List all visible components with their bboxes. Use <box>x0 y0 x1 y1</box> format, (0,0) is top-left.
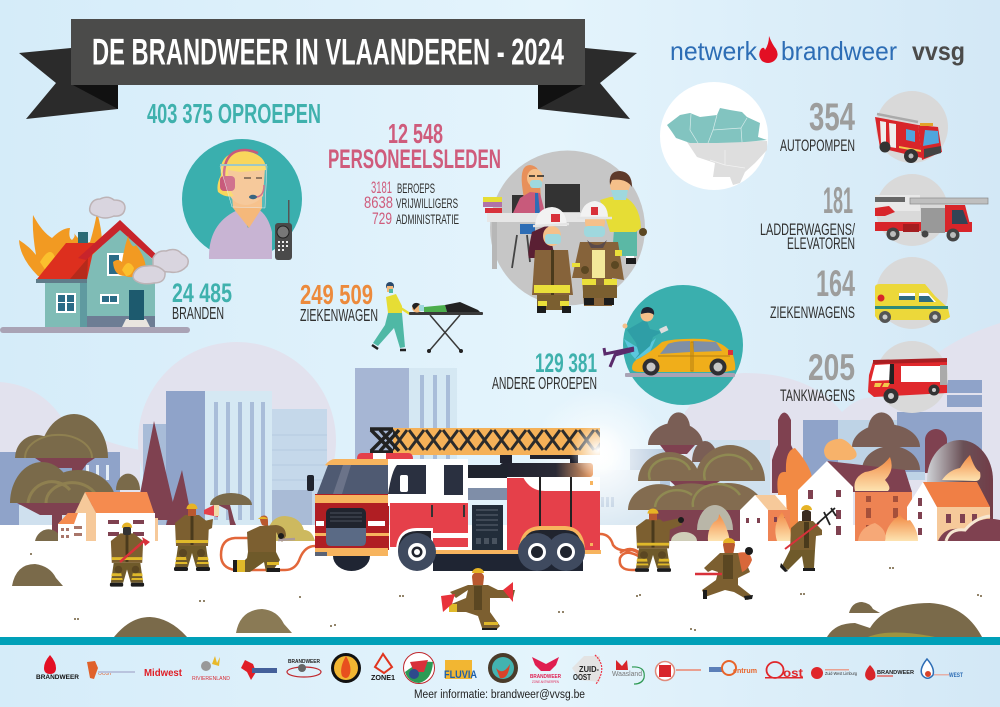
staff breakdown: VRIJWILLIGERS <box>396 196 458 211</box>
heading: staff: PERSONEELSLEDEN <box>328 144 501 174</box>
logo: oost <box>765 662 803 680</box>
logo: round emblem <box>404 652 434 684</box>
yellow car <box>632 339 735 376</box>
logo: waasland: Waasland <box>612 669 642 678</box>
stat: other calls <box>492 348 597 393</box>
stat: ambulance calls <box>300 279 378 325</box>
icon: red flame <box>759 36 778 63</box>
staff breakdown: 3181 <box>371 178 392 197</box>
left tree group <box>10 414 252 541</box>
stat: pumps: AUTOPOMPEN <box>780 136 855 155</box>
logo: brandweer zone antwerpen <box>530 657 561 684</box>
logo: zuid-oost <box>572 655 602 684</box>
logo: westhoek <box>656 662 701 680</box>
logo: rivierenland: RIVIERENLAND <box>192 676 230 682</box>
logo row <box>36 652 963 684</box>
road <box>625 373 735 377</box>
icon: fire engine <box>875 91 948 163</box>
title banner <box>19 19 637 119</box>
background city skyline <box>0 323 1000 540</box>
logo: oost: ost <box>783 666 803 680</box>
logo: zuid-west limburg <box>811 667 857 679</box>
footer contact text: Meer informatie: brandweer@vvsg.be <box>414 689 585 701</box>
white ground <box>0 525 1000 637</box>
right trees and burning houses <box>628 412 1000 541</box>
logo: midwest: Midwest <box>144 668 183 679</box>
logo: zone 1 <box>371 654 395 682</box>
stat: ladder trucks <box>760 179 855 253</box>
firefighter from behind <box>635 508 684 572</box>
personnel illustration <box>483 150 647 313</box>
staff breakdown: ADMINISTRATIE <box>396 212 459 227</box>
kneeling firefighter with hose <box>233 516 295 572</box>
logo: netwerk brandweer <box>670 36 897 66</box>
stat: tankers: 205 <box>808 346 855 388</box>
firefighter with axe <box>110 522 150 587</box>
paramedic with stretcher <box>372 282 483 353</box>
stat: pumps <box>780 96 855 155</box>
flames on upper floor <box>113 236 146 277</box>
logo: brandweer westhoek: BRANDWEER <box>877 670 914 676</box>
heading: total calls: 403 375 OPROEPEN <box>147 98 321 129</box>
stat: fires: BRANDEN <box>172 303 224 323</box>
icon: tanker <box>868 341 948 413</box>
logo: netwerk brandweer: brandweer <box>781 36 897 66</box>
operator illustration <box>182 139 302 260</box>
stat: ambulances <box>770 262 855 322</box>
firefighter with megaphone <box>174 504 219 571</box>
truck wheels <box>398 533 585 571</box>
left houses <box>58 492 158 541</box>
heading: staff <box>328 118 501 228</box>
smoke clouds <box>90 197 188 284</box>
logo: hulpverleningszone oost <box>87 661 135 679</box>
logo: waasland <box>612 660 644 684</box>
logo: rivierenland <box>192 656 230 682</box>
logo: west: WEST <box>949 673 963 679</box>
staff breakdown: BEROEPS <box>397 181 435 196</box>
stat: fires: 24 485 <box>172 278 232 308</box>
stat: ladder trucks: ELEVATOREN <box>787 234 855 253</box>
heading: staff: 12 548 <box>388 118 443 149</box>
logo: vvsg: vvsg <box>912 36 965 66</box>
logo: brandweer: BRANDWEER <box>36 675 80 681</box>
stat: tankers <box>780 346 855 405</box>
logo: brandweer arc: BRANDWEER <box>288 659 320 665</box>
icon: walkie talkie <box>275 200 292 260</box>
stat: ambulance calls: 249 509 <box>300 279 373 310</box>
firefighter woman <box>528 207 573 313</box>
burning house illustration <box>0 197 190 333</box>
stat: pumps: 354 <box>809 96 855 139</box>
bottom band <box>0 637 1000 645</box>
running firefighter with rescue gear <box>695 538 753 600</box>
stat: ladder trucks: 181 <box>823 179 853 221</box>
logo: zuid-west limburg: Zuid-West Limburg <box>825 671 857 676</box>
running firefighter with bucket <box>441 568 515 630</box>
logo: centrum: entrum <box>733 666 757 675</box>
logo: west <box>921 659 963 679</box>
logo: zone 1: ZONE1 <box>371 675 395 682</box>
staff breakdown: 729 <box>372 209 392 228</box>
logo: brandweer westhoek <box>865 665 914 680</box>
stat: tankers: TANKWAGENS <box>780 386 855 405</box>
stat: fires <box>172 278 232 323</box>
logo: round flame badge <box>331 653 361 683</box>
firefighter with hook <box>780 505 836 572</box>
stat: ladder trucks: LADDERWAGENS/ <box>760 220 855 239</box>
logo: netwerk brandweer: netwerk <box>670 36 758 66</box>
logo: brandweer arc <box>287 659 321 677</box>
staff breakdown: 8638 <box>364 193 393 212</box>
logo: zuid-oost: ZUID- <box>579 665 599 674</box>
logo: hulpverleningszone oost: OOST <box>98 671 112 677</box>
stat: other calls: 129 381 <box>535 348 597 378</box>
firefighter man <box>572 201 624 306</box>
icon: ambulance <box>875 257 950 329</box>
fire truck <box>307 422 626 571</box>
ladder <box>370 428 600 455</box>
logo: brandweer zone antwerpen: BRANDWEER <box>530 674 561 680</box>
stat: ambulance calls: ZIEKENWAGEN <box>300 305 378 325</box>
truck body <box>388 459 601 571</box>
fire hoses <box>221 534 645 570</box>
ground bushes and tufts <box>12 516 982 637</box>
logo: brandweer <box>36 655 80 681</box>
logo: centrum <box>709 661 757 675</box>
stat: ambulances: 164 <box>816 262 855 304</box>
stat: ambulances: ZIEKENWAGENS <box>770 303 855 322</box>
logo: round badge <box>488 653 518 683</box>
flames behind house <box>19 212 102 280</box>
logo: fluvia: FLUVIA <box>444 669 477 681</box>
staff breakdown <box>364 178 459 228</box>
truck cab <box>307 459 396 571</box>
icon: ladder truck <box>875 174 988 246</box>
title: DE BRANDWEER IN VLAANDEREN - 2024 <box>92 32 564 72</box>
falling person <box>604 307 668 367</box>
other calls illustration <box>604 285 743 405</box>
logo: zuid-oost: OOST <box>573 673 591 682</box>
logo: brandweer zone antwerpen: ZONE ANTWERPEN <box>532 679 559 684</box>
man at desk <box>600 171 647 264</box>
map of Belgium <box>660 82 768 190</box>
logo: fluvia <box>444 660 477 681</box>
stat: other calls: ANDERE OPROEPEN <box>492 373 597 393</box>
logo: brandweer zone <box>241 660 277 680</box>
